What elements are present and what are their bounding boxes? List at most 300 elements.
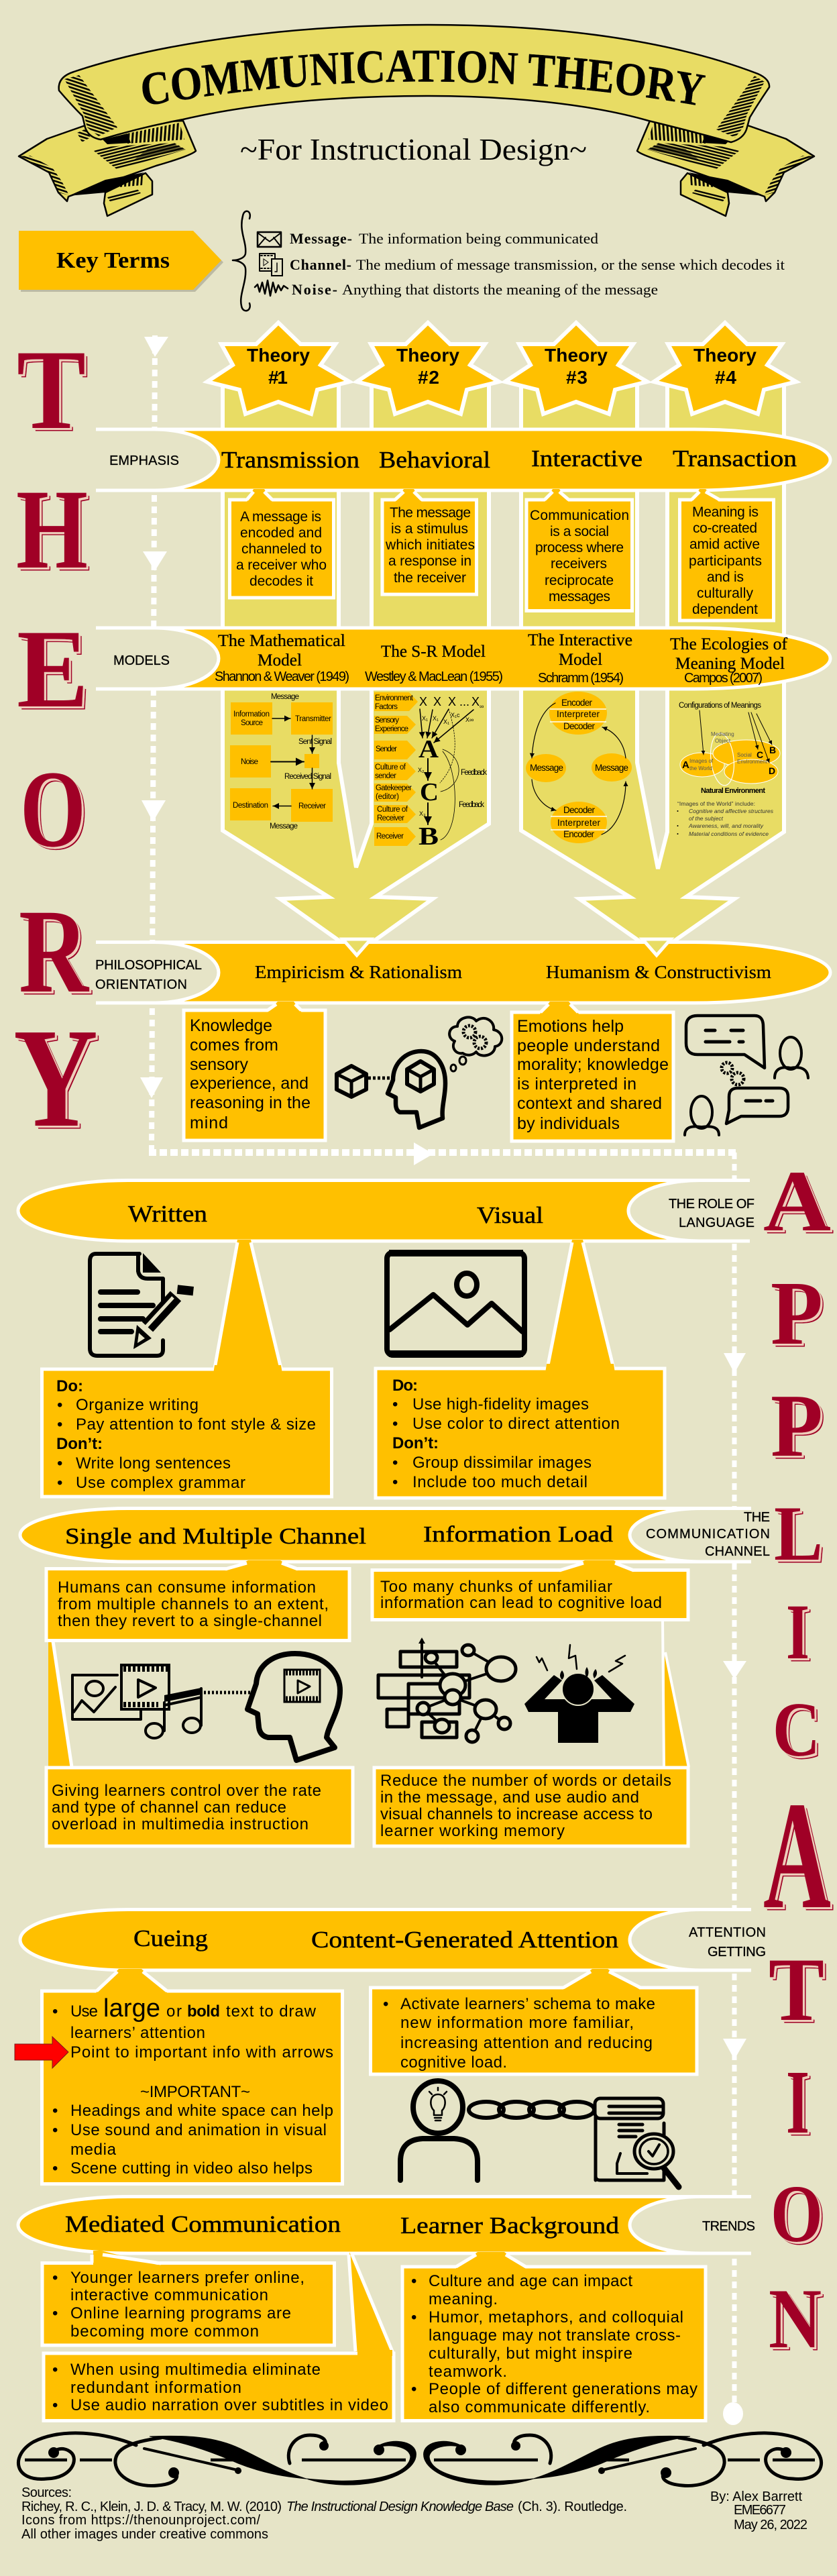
callout: theory 2 emphasis: is a stimulus — [391, 521, 468, 537]
callout: humanism text — [512, 1002, 673, 1141]
icon: people conversing — [685, 1016, 808, 1135]
diagram: S-R model: A — [418, 735, 439, 763]
diagram: S-R model: X₂ — [418, 767, 425, 773]
band: attention getting: GETTING — [708, 1945, 766, 1960]
panel: mediated communication bottom: • — [52, 2361, 58, 2379]
diagram: ecologies of meaning model: of the subject — [689, 815, 724, 822]
callout: theory 2 emphasis: which initiates — [385, 537, 475, 553]
panel: cueing: bold — [187, 2002, 220, 2021]
panel: mediated communication top: becoming more common — [70, 2322, 259, 2341]
panel: written do and don't: Write long sentences — [76, 1454, 231, 1472]
key terms tag: Key Terms — [56, 248, 170, 273]
diagram: S-R model: Environment — [375, 694, 414, 702]
band: models: The Interactive — [528, 631, 632, 649]
panel: visual do and don't: Don’t: — [392, 1434, 439, 1452]
band: models: The S-R Model — [381, 643, 486, 661]
vertical word: APPLICATION: I — [787, 1589, 811, 1677]
sources: Sources: — [21, 2485, 72, 2500]
callout: theory 4 emphasis: co-created — [693, 521, 757, 536]
panel: cueing: • — [52, 2159, 58, 2178]
diagram: ecologies of meaning model: Configurations of Meanings — [679, 702, 761, 710]
diagram: S-R model: Receiver — [376, 833, 404, 841]
callout: theory 4 emphasis: culturally — [697, 586, 754, 601]
callout: empiricism text: comes from — [190, 1036, 278, 1055]
panel: visual do and don't: • — [392, 1395, 398, 1413]
band: communication channel — [20, 1508, 770, 1562]
noise term: Anything that distorts the meaning of the message — [342, 281, 658, 298]
star 3: #3 — [566, 367, 588, 388]
band: attention getting: ATTENTION — [689, 1925, 766, 1940]
panel: content-generated attention: • — [383, 1995, 388, 2013]
subtitle: ~For Instructional Design~ — [240, 133, 587, 166]
panel: learner background: • — [411, 2308, 416, 2326]
vertical word: APPLICATION: N — [770, 2273, 823, 2367]
band: communication channel: THE — [744, 1510, 770, 1525]
callout: theory 3 emphasis: is a social — [550, 524, 609, 539]
diagram: ecologies of meaning model: Material conditions of evidence — [689, 830, 769, 837]
callout: reduce words: learner working memory — [380, 1822, 565, 1840]
callout: reduce words: Reduce the number of words or details — [380, 1772, 671, 1790]
panel: content-generated attention: new information more familiar, — [400, 2014, 634, 2032]
sources: The Instructional Design Knowledge Base — [286, 2500, 514, 2514]
panel: learner background: language may not translate cross- — [429, 2326, 681, 2345]
diagram: mathematical model: Received Signal — [284, 773, 331, 781]
key terms tag — [19, 231, 223, 292]
noise box: Noise — [241, 758, 258, 766]
diagram: interactive model: Decoder — [563, 805, 596, 815]
diagram: interactive model: Encoder — [563, 829, 594, 839]
panel: learner background: teamwork. — [429, 2363, 507, 2381]
panel: mediated communication bottom: • — [52, 2396, 58, 2414]
band: role of language — [18, 1181, 755, 1241]
author — [710, 2489, 807, 2532]
callout: humanism text: by individuals — [517, 1114, 620, 1133]
panel: written do and don't: Do: — [56, 1377, 83, 1395]
panel: cueing: Use sound and animation in visual — [70, 2121, 327, 2139]
panel: cueing: or — [166, 2002, 182, 2021]
panel: mediated communication top: Online learning programs are — [70, 2304, 291, 2322]
icon: image — [387, 1252, 524, 1355]
panel: written do and don't — [42, 1365, 331, 1497]
callout: theory 1 emphasis: a receiver who — [236, 557, 327, 573]
callout: single and multiple channel — [46, 1560, 349, 1641]
vertical word: THEORY: E — [18, 608, 90, 733]
diagram: S-R model: sender — [375, 772, 396, 780]
noise box — [230, 745, 271, 777]
receiver box — [291, 789, 333, 822]
callout: theory 1 emphasis: encoded and — [240, 525, 322, 541]
band: role of language: Written — [128, 1201, 207, 1227]
band: models: Westley & MacLean (1955) — [365, 669, 503, 684]
panel: written do and don't: • — [57, 1415, 62, 1434]
ornament flourish — [18, 2433, 822, 2485]
icon: envelope — [258, 232, 281, 247]
diagram: S-R model: Sender — [376, 745, 397, 753]
big arrow: theories 3 and 4 — [521, 376, 784, 953]
author: EME6677 — [734, 2503, 786, 2518]
key term definitions — [255, 230, 785, 298]
author: May 26, 2022 — [734, 2518, 807, 2532]
diagram: ecologies of meaning model: Object — [715, 738, 731, 744]
channel term: The medium of message transmission, or the sense which decodes it — [356, 256, 785, 273]
band: emphasis: Behavioral — [379, 447, 490, 473]
diagram: ecologies of meaning model: Awareness, will, and morality — [688, 822, 764, 829]
diagram: S-R model: ∞ — [480, 703, 484, 710]
panel: written do and don't: • — [57, 1474, 62, 1492]
panel: visual do and don't — [376, 1364, 665, 1498]
panel: content-generated attention: cognitive load. — [400, 2053, 507, 2072]
band: emphasis: Interactive — [531, 445, 643, 472]
panel: learner background: meaning. — [429, 2290, 498, 2308]
diagram: mathematical model: Sent Signal — [298, 738, 332, 746]
callout: theory 1 emphasis: decodes it — [249, 574, 313, 589]
callout: theory 4 emphasis — [680, 489, 774, 621]
panel: cueing: large — [103, 1994, 160, 2023]
callout: empiricism text: Knowledge — [190, 1016, 272, 1035]
callout: give learners control: and type of channel can reduce — [52, 1799, 286, 1817]
band: communication channel: COMMUNICATION — [646, 1527, 770, 1542]
panel: mediated communication top: • — [52, 2269, 58, 2287]
diagram: ecologies of meaning model: Cognitive and affective structures — [689, 808, 774, 814]
band: role of language: LANGUAGE — [679, 1216, 755, 1230]
panel: learner background — [402, 2252, 706, 2420]
brace — [233, 211, 250, 311]
star 4: Theory — [693, 345, 757, 366]
diagram: interactive model: Encoder — [561, 698, 593, 708]
stars — [207, 323, 796, 414]
transmitter box: Transmitter — [295, 715, 331, 723]
band: models: The Ecologies of — [670, 635, 788, 653]
callout: theory 4 emphasis: and is — [707, 570, 744, 585]
diagram: mathematical model — [230, 693, 333, 830]
callout: give learners control: Giving learners control over the rate — [52, 1782, 321, 1800]
panel: mediated communication top — [42, 2251, 334, 2345]
callout: reduce words: in the message, and use audio and — [380, 1788, 639, 1807]
band: communication channel: CHANNEL — [705, 1544, 770, 1559]
information source box: Source — [241, 719, 263, 727]
vertical word: APPLICATION: A — [765, 1155, 832, 1251]
panel: cueing: • — [52, 2002, 58, 2021]
callout: reduce words — [374, 1768, 688, 1846]
panel: learner background: • — [411, 2380, 416, 2398]
diagram: S-R model: X₁ — [422, 715, 428, 722]
icon: film strip — [121, 1665, 169, 1709]
callout: theory 1 emphasis: channeled to — [241, 541, 322, 557]
diagram: S-R model: X — [419, 695, 427, 708]
band: trends — [18, 2196, 755, 2253]
diagram: ecologies of meaning model: • — [677, 808, 679, 814]
icon: channel — [260, 254, 282, 276]
callout: theory 3 emphasis: process where — [535, 540, 624, 555]
callout: theory 4 emphasis: amid active — [689, 537, 760, 552]
panel: cueing: • — [52, 2102, 58, 2120]
diagram: ecologies of meaning model: A — [682, 759, 689, 771]
band: philosophical orientation: Empiricism & Rationalism — [255, 962, 462, 982]
band: attention getting: Cueing — [133, 1925, 208, 1951]
callout: empiricism text: sensory — [190, 1055, 248, 1074]
panel: mediated communication bottom: Use audio narration over subtitles in video — [70, 2396, 388, 2414]
callout: theory 3 emphasis: messages — [549, 589, 610, 604]
vertical word: APPLICATION: I — [787, 2053, 811, 2154]
diagram: ecologies of meaning model: D — [769, 765, 775, 776]
band: emphasis: Transmission — [221, 447, 359, 473]
noise term: Noise- — [292, 281, 337, 298]
callout: theory 2 emphasis: The message — [390, 505, 471, 521]
callout: theory 1 emphasis — [229, 489, 334, 598]
diagram: ecologies of meaning model: • — [677, 822, 679, 829]
panel: learner background: also communicate differently. — [429, 2398, 650, 2416]
information source box — [231, 702, 272, 735]
title: COMMUNICATION THEORY — [142, 50, 706, 105]
panel: written do and don't: Use complex grammar — [76, 1474, 245, 1492]
icon: thought cloud — [449, 1017, 502, 1071]
pointer: visual — [545, 1240, 615, 1373]
panel: content-generated attention: increasing attention and reducing — [400, 2034, 653, 2052]
callout: theory 4 emphasis: participants — [689, 553, 762, 569]
band: philosophical orientation: ORIENTATION — [95, 977, 187, 992]
panel: learner background: • — [411, 2272, 416, 2290]
panel: visual do and don't: Group dissimilar images — [412, 1454, 592, 1472]
band: models: Meaning Model — [675, 655, 785, 673]
diagram: interactive model — [526, 692, 632, 843]
star 3 — [505, 323, 647, 414]
icon: network overload — [378, 1638, 516, 1742]
panel: visual do and don't: Use high-fidelity images — [412, 1395, 589, 1413]
panel: learner background: Humor, metaphors, and colloquial — [429, 2308, 683, 2326]
diagram: S-R model: Experience — [375, 725, 408, 733]
transmitter box — [291, 702, 333, 735]
icon: head with film — [247, 1654, 340, 1760]
diagram: ecologies of meaning model: “Images of the World” include: — [677, 800, 755, 807]
icon: big cube in head — [407, 1061, 434, 1091]
callout: single and multiple channel: then they revert to a single-channel — [58, 1612, 322, 1630]
banner ribbon — [19, 25, 814, 216]
band: models: Model — [559, 651, 602, 669]
diagram: S-R model: Culture of — [375, 763, 406, 771]
information source box: Information — [233, 710, 270, 718]
channel term: Channel- — [290, 256, 351, 273]
callout: empiricism text: experience, and — [190, 1074, 309, 1093]
band: models: Schramm (1954) — [538, 671, 624, 686]
panel: visual do and don't: Do: — [392, 1377, 418, 1395]
callout: humanism text: morality; knowledge — [517, 1055, 669, 1074]
callout: reduce words: visual channels to increase access to — [380, 1805, 653, 1823]
vertical word: APPLICATION: P — [772, 1265, 824, 1365]
star 1: #1 — [268, 367, 288, 388]
sources — [21, 2485, 627, 2542]
band: models: Model — [258, 651, 302, 669]
panel: written do and don't: Organize writing — [76, 1396, 199, 1414]
diagram: ecologies of meaning model: • — [677, 830, 679, 837]
panel: written do and don't: • — [57, 1454, 62, 1472]
diagram: S-R model — [374, 692, 487, 851]
panel: cueing: Use — [70, 2002, 98, 2021]
panel: mediated communication bottom: redundant information — [70, 2379, 241, 2397]
callout: humanism text: people understand — [517, 1036, 660, 1055]
panel: content-generated attention — [370, 1969, 697, 2074]
vertical word: THEORY: T — [18, 328, 87, 454]
icon: cube to head with thought — [337, 1017, 502, 1128]
band: attention getting — [20, 1909, 766, 1970]
band: philosophical orientation: Humanism & Constructivism — [546, 962, 771, 982]
band: communication channel: Single and Multiple Channel — [65, 1524, 366, 1549]
icon: written document with pencil — [90, 1253, 190, 1356]
panel: cueing: Scene cutting in video also helps — [70, 2159, 313, 2178]
panel: written do and don't: • — [57, 1396, 62, 1414]
diagram: S-R model: B — [418, 822, 439, 851]
star 2 — [357, 323, 499, 414]
flow arrow dashed: theory — [140, 335, 746, 2425]
star 1: Theory — [247, 345, 310, 366]
callout: empiricism text: reasoning in the — [190, 1093, 311, 1112]
diagram: S-R model: Receiver — [377, 814, 404, 822]
panel: cueing: text to draw — [226, 2002, 317, 2021]
panel: learner background: Culture and age can impact — [429, 2272, 632, 2290]
panel: visual do and don't: • — [392, 1415, 398, 1433]
vertical word: THEORY — [15, 328, 99, 1158]
diagram: ecologies of meaning model: Mediating — [711, 731, 734, 737]
message term: The information being communicated — [359, 230, 598, 247]
diagram: ecologies of meaning model — [677, 702, 780, 837]
diagram: ecologies of meaning model: Images of — [689, 758, 714, 764]
callout: theory 3 emphasis: reciprocate — [545, 573, 614, 588]
callout: theory 3 emphasis — [526, 489, 632, 610]
band: models: The Mathematical — [218, 632, 345, 650]
panel: visual do and don't: Include too much detail — [412, 1473, 588, 1491]
callout: information load: Too many chunks of unfamiliar — [380, 1578, 612, 1596]
vertical word: THEORY: Y — [15, 1000, 99, 1158]
panel: cueing: Point to important info with arrows — [70, 2043, 333, 2061]
diagram: S-R model: Feedback — [461, 769, 487, 777]
icon: head — [388, 1051, 445, 1128]
panel: visual do and don't: Use color to direct attention — [412, 1415, 620, 1433]
star 4 — [654, 323, 796, 414]
callout: theory 3 emphasis: receivers — [551, 556, 607, 572]
diagram: S-R model: C — [420, 778, 439, 806]
band: attention getting: Content-Generated Attention — [311, 1927, 618, 1953]
diagram: S-R model: Gatekeeper — [376, 784, 412, 792]
star 4: #4 — [715, 367, 736, 388]
band: trends: Learner Background — [400, 2212, 620, 2239]
callout: humanism text: is interpreted in — [517, 1075, 636, 1093]
sources: All other images under creative commons — [21, 2527, 268, 2542]
callout: theory 1 emphasis: A message is — [240, 509, 321, 525]
callout: theory 4 emphasis: dependent — [692, 602, 758, 617]
callout: theory 3 emphasis: Communication — [530, 508, 629, 523]
diagram: S-R model: X₁ — [433, 715, 439, 722]
panel: visual do and don't: • — [392, 1473, 398, 1491]
band: role of language: Visual — [477, 1202, 543, 1228]
callout: single and multiple channel: from multiple channels to an extent, — [58, 1595, 329, 1613]
band: communication channel: Information Load — [423, 1522, 613, 1547]
sources: Icons from https://thenounproject.com/ — [21, 2513, 260, 2528]
panel: mediated communication top: • — [52, 2304, 58, 2322]
diagram: interactive model: Decoder — [563, 721, 596, 731]
band: models: Campos (2007) — [684, 671, 763, 686]
band: role of language: THE ROLE OF — [669, 1197, 755, 1212]
panel: written do and don't: Don’t: — [56, 1435, 103, 1453]
vertical word: THEORY: R — [20, 885, 91, 1019]
diagram: ecologies of meaning model: Natural Environment — [701, 787, 765, 795]
callout: empiricism text — [184, 1002, 325, 1140]
callout: theory 2 emphasis: a response in — [388, 553, 471, 569]
diagram: S-R model: X₃ — [419, 810, 426, 817]
callout: theory 2 emphasis: the receiver — [394, 570, 466, 586]
icon: schema chain — [400, 2081, 679, 2187]
diagram: S-R model: Culture of — [377, 806, 408, 814]
icon: red arrow — [15, 2037, 68, 2068]
vertical word: APPLICATION — [765, 1155, 832, 2367]
star 2: #2 — [418, 367, 439, 388]
icon: music note — [146, 1688, 201, 1738]
star 3: Theory — [545, 345, 608, 366]
diagram: S-R model: ... — [459, 695, 469, 708]
message term: Message- — [290, 230, 352, 247]
band: emphasis: EMPHASIS — [109, 453, 179, 468]
diagram: S-R model: X∞ — [465, 716, 473, 723]
callout: theory 4 emphasis: Meaning is — [692, 504, 759, 520]
diagram: S-R model: Sensory — [375, 716, 399, 724]
diagram: S-R model: X₁ — [443, 718, 449, 725]
panel: learner background: culturally, but might inspire — [429, 2345, 632, 2363]
band: philosophical orientation — [95, 939, 830, 1004]
panel: cueing: ~IMPORTANT~ — [140, 2083, 250, 2101]
vertical word: APPLICATION: O — [772, 2170, 824, 2261]
star 2: Theory — [396, 345, 459, 366]
diagram: interactive model: Message — [530, 763, 563, 773]
vertical word: THEORY: H — [17, 468, 89, 594]
vertical word: THEORY: O — [21, 750, 87, 871]
diagram: ecologies of meaning model: B — [769, 745, 776, 755]
panel: mediated communication bottom: When using multimedia eliminate — [70, 2361, 321, 2379]
panel: content-generated attention: Activate learners’ schema to make — [400, 1995, 655, 2013]
icon: small cube — [337, 1066, 366, 1097]
diagram: S-R model: Feedback — [459, 801, 484, 809]
sources: (Ch. 3). Routledge. — [518, 2500, 627, 2514]
panel: cueing: • — [52, 2121, 58, 2139]
callout: humanism text: Emotions help — [517, 1017, 624, 1036]
diagram: mathematical model: Message — [270, 822, 298, 830]
destination box: Destination — [233, 802, 268, 810]
callout: give learners control — [46, 1768, 353, 1846]
band: models: MODELS — [113, 653, 170, 668]
callout: theory 2 emphasis — [382, 489, 476, 594]
band: trends: Mediated Communication — [65, 2211, 341, 2237]
callout: empiricism text: mind — [190, 1114, 228, 1132]
vertical word: APPLICATION: T — [770, 1941, 826, 2041]
author: By: Alex Barrett — [710, 2489, 802, 2504]
panel: cueing: Headings and white space can help — [70, 2102, 333, 2120]
diagram: mathematical model: Message — [271, 693, 299, 701]
panel: mediated communication top: Younger learners prefer online, — [70, 2269, 304, 2287]
diagram: interactive model: Message — [595, 763, 628, 773]
diagram: ecologies of meaning model: C — [757, 749, 763, 760]
callout: give learners control: overload in multimedia instruction — [52, 1815, 309, 1833]
pointer: written — [213, 1240, 282, 1374]
vertical word: APPLICATION: P — [772, 1377, 824, 1477]
diagram: interactive model: Interpreter — [557, 818, 601, 828]
destination box — [230, 788, 271, 820]
diagram: ecologies of meaning model: the World — [689, 765, 712, 771]
diagram: ecologies of meaning model: Environment — [737, 759, 768, 765]
diagram: S-R model: X — [433, 695, 441, 708]
icon: noise — [255, 280, 288, 296]
diagram: S-R model: (editor) — [376, 793, 399, 801]
sources: Richey, R. C., Klein, J. D. & Tracy, M. W. (2010) — [21, 2500, 282, 2514]
star 1 — [207, 323, 349, 414]
callout: humanism text: context and shared — [517, 1094, 662, 1113]
receiver box: Receiver — [298, 802, 326, 810]
